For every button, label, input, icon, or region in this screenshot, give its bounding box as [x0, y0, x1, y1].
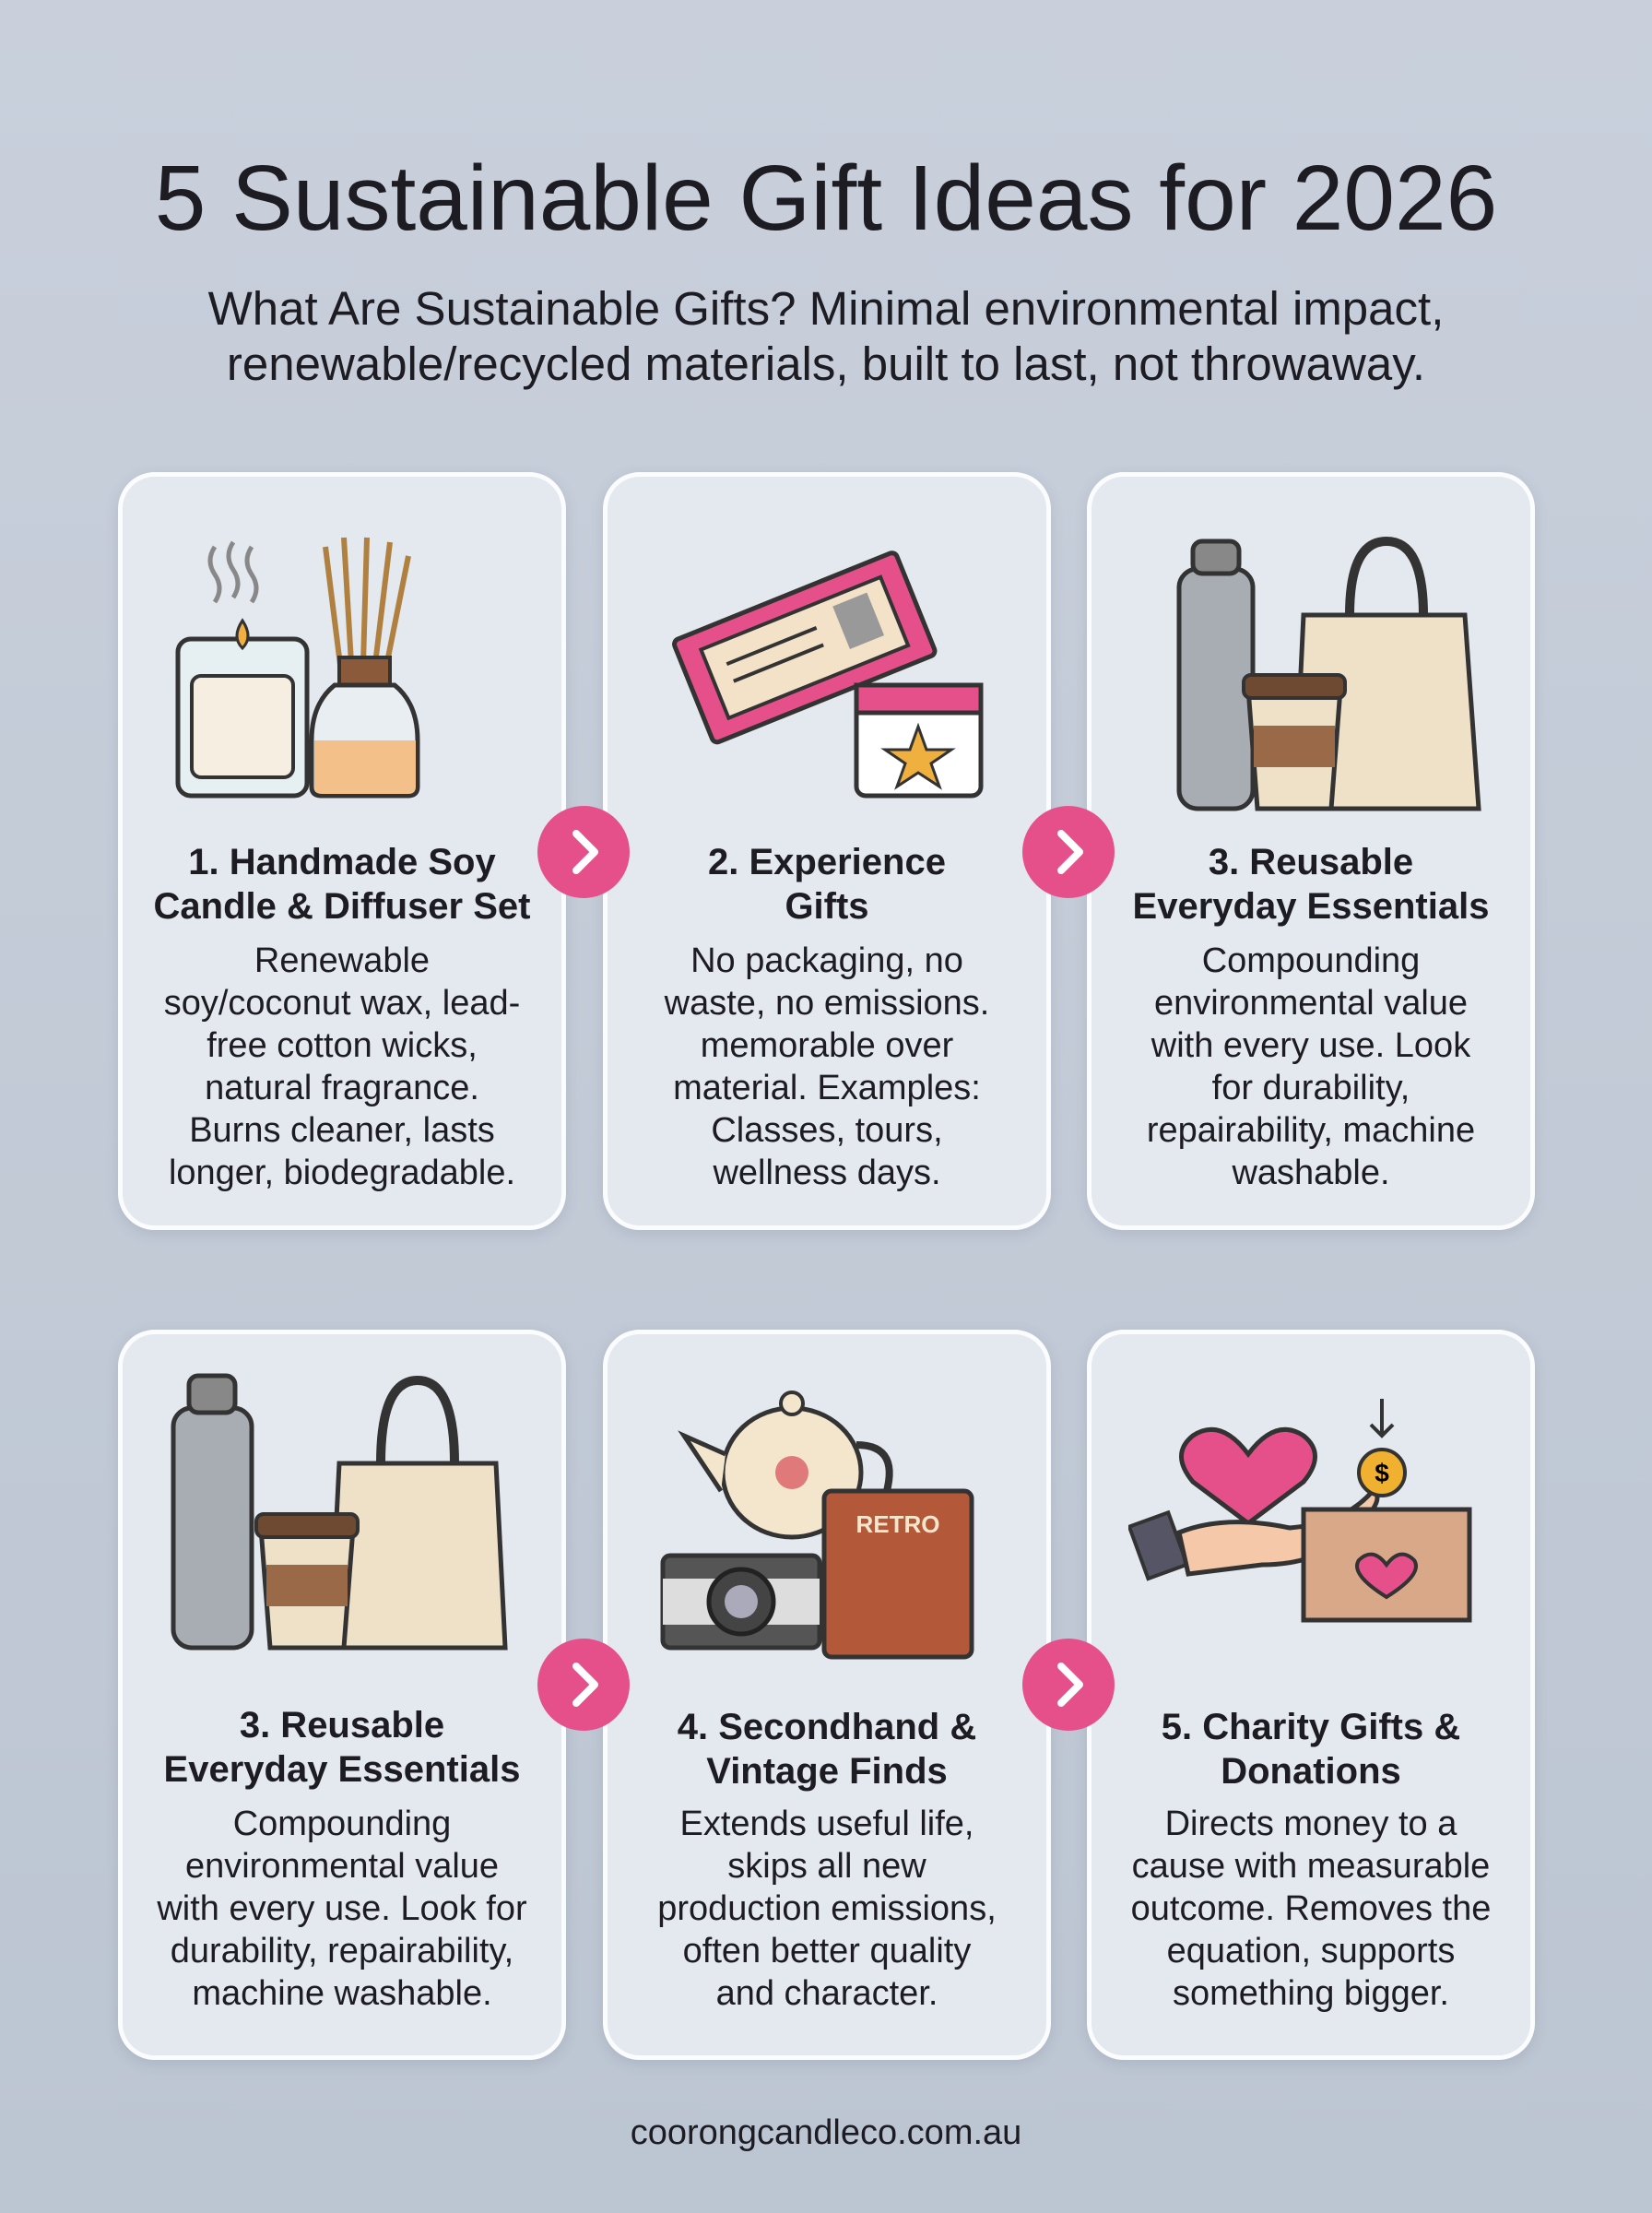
- card title: [1133, 842, 1489, 927]
- card title: 5. Charity Gifts &: [1162, 1707, 1460, 1747]
- icon: teapot camera book: [660, 1391, 974, 1660]
- card text: often better quality: [683, 1932, 971, 1970]
- card title: 1. Handmade Soy: [188, 842, 496, 882]
- card title: 3. Reusable: [1209, 842, 1413, 882]
- arrow 2: [1022, 806, 1115, 898]
- arrow 3: [537, 1639, 630, 1731]
- card title: Candle & Diffuser Set: [154, 886, 530, 927]
- icon: teapot camera book: RETRO: [856, 1510, 940, 1538]
- card text: longer, biodegradable.: [169, 1154, 515, 1192]
- card title: [708, 842, 946, 927]
- card text: Burns cleaner, lasts: [189, 1111, 495, 1150]
- card text: material. Examples:: [673, 1069, 981, 1107]
- card title: Everyday Essentials: [1133, 886, 1489, 927]
- card text: and character.: [716, 1974, 938, 2013]
- card text: natural fragrance.: [205, 1069, 479, 1107]
- title: 5 Sustainable Gift Ideas for 2026: [155, 147, 1497, 250]
- icon: bottle cup bag: [1176, 537, 1481, 811]
- arrow 1: [537, 806, 630, 898]
- card title: 2. Experience: [708, 842, 946, 882]
- card title: Everyday Essentials: [164, 1749, 520, 1790]
- card text: skips all new: [727, 1847, 926, 1886]
- card text: machine washable.: [192, 1974, 492, 2013]
- arrow 4: [1022, 1639, 1115, 1731]
- card text: for durability,: [1212, 1069, 1410, 1107]
- card text: [164, 941, 520, 1192]
- card title: Vintage Finds: [706, 1751, 948, 1792]
- card title: [1162, 1707, 1460, 1792]
- subtitle: renewable/recycled materials, built to last, not throwaway.: [227, 337, 1425, 390]
- icon: ticket and calendar: [672, 550, 983, 799]
- card text: something bigger.: [1173, 1974, 1449, 2013]
- card text: [664, 941, 989, 1192]
- icon: hand heart donation box: [1128, 1399, 1471, 1623]
- card title: Gifts: [785, 886, 869, 927]
- card text: wellness days.: [713, 1154, 941, 1192]
- card text: durability, repairability,: [171, 1932, 513, 1970]
- icon: candle and diffuser: [175, 537, 420, 799]
- icon: hand heart donation box: $: [1375, 1459, 1389, 1487]
- card text: Compounding: [1202, 941, 1420, 980]
- subtitle: [208, 282, 1444, 390]
- card text: repairability, machine: [1147, 1111, 1475, 1150]
- card text: [657, 1805, 997, 2013]
- card text: equation, supports: [1167, 1932, 1455, 1970]
- card text: soy/coconut wax, lead-: [164, 984, 520, 1023]
- card text: washable.: [1232, 1154, 1390, 1192]
- card text: [1131, 1805, 1491, 2013]
- panel: reusable: [1087, 472, 1535, 1230]
- subtitle: What Are Sustainable Gifts? Minimal environmental impact,: [208, 282, 1444, 335]
- card text: production emissions,: [657, 1889, 997, 1928]
- card text: Renewable: [254, 941, 430, 980]
- icon: bottle cup bag: [171, 1374, 508, 1651]
- card title: [154, 842, 530, 927]
- panel: charity: [1087, 1330, 1535, 2060]
- card text: with every use. Look: [1151, 1026, 1470, 1065]
- card title: [164, 1705, 520, 1790]
- card text: [157, 1805, 527, 2013]
- card text: cause with measurable: [1132, 1847, 1490, 1886]
- panel: experience: [603, 472, 1051, 1230]
- footer: coorongcandleco.com.au: [631, 2113, 1021, 2152]
- card text: Extends useful life,: [680, 1805, 974, 1843]
- card title: 4. Secondhand &: [678, 1707, 976, 1747]
- card text: outcome. Removes the: [1131, 1889, 1491, 1928]
- panel: secondhand: [603, 1330, 1051, 2060]
- card title: Donations: [1221, 1751, 1401, 1792]
- panel: candle: [118, 472, 566, 1230]
- card title: 3. Reusable: [240, 1705, 444, 1746]
- card text: free cotton wicks,: [206, 1026, 478, 1065]
- card text: Compounding: [233, 1805, 451, 1843]
- card text: [1147, 941, 1475, 1192]
- card text: waste, no emissions.: [665, 984, 989, 1023]
- card text: environmental value: [185, 1847, 499, 1886]
- card text: memorable over: [701, 1026, 953, 1065]
- card text: with every use. Look for: [157, 1889, 527, 1928]
- card text: environmental value: [1154, 984, 1468, 1023]
- card text: Directs money to a: [1165, 1805, 1457, 1843]
- card title: [678, 1707, 976, 1792]
- card text: Classes, tours,: [711, 1111, 943, 1150]
- card text: No packaging, no: [690, 941, 963, 980]
- panel: reusable row 2: [118, 1330, 566, 2060]
